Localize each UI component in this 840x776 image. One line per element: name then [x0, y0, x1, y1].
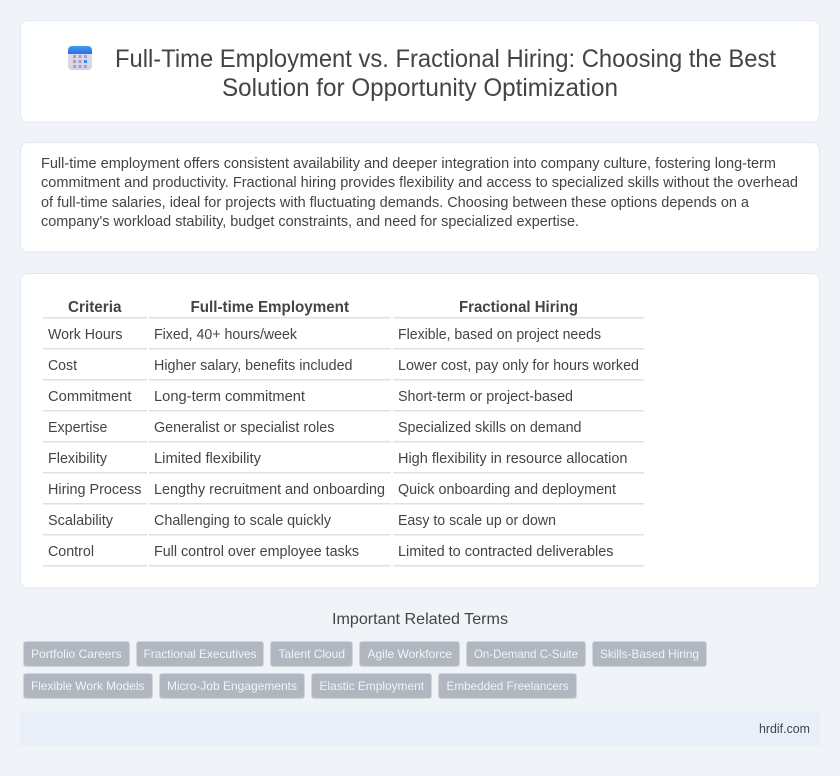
- row: control: Full control over employee tasks: [154, 544, 359, 560]
- tag: Skills-Based Hiring: Skills-Based Hiring: [600, 647, 699, 661]
- heading: related terms: Important Related Terms: [332, 611, 508, 628]
- tag: Micro-Job Engagements: [160, 674, 304, 698]
- icon: calendar: [68, 46, 92, 70]
- tag: Portfolio Careers: [24, 642, 130, 666]
- row: control: Limited to contracted deliverables: [398, 544, 614, 560]
- tag: Elastic Employment: Elastic Employment: [320, 679, 425, 693]
- row: expertise: Generalist or specialist roles: [154, 420, 334, 436]
- row: commitment: Long-term commitment: [154, 389, 305, 405]
- summary paragraph: [41, 156, 798, 230]
- summary paragraph: commitment and productivity. Fractional hiring provides flexibility and access to specialized skills without the overhead: [41, 175, 798, 191]
- tag: Fractional Executives: [136, 642, 264, 666]
- title: Full-Time Employment vs. Fractional Hiring: Choosing the Best: [115, 45, 776, 73]
- tag: Portfolio Careers: Portfolio Careers: [31, 647, 122, 661]
- tag: Embedded Freelancers: Embedded Freelancers: [446, 679, 568, 693]
- row: expertise: [48, 420, 582, 436]
- row: cost: Higher salary, benefits included: [154, 358, 352, 374]
- row: cost: Cost: [48, 358, 77, 374]
- tag: On-Demand C-Suite: On-Demand C-Suite: [474, 647, 578, 661]
- table header: Criteria: [68, 299, 122, 316]
- row: work hours: Flexible, based on project needs: [398, 327, 601, 343]
- row: hiring process: [48, 482, 616, 498]
- row: work hours: [48, 327, 601, 343]
- panel: summary text: [20, 142, 820, 252]
- footer bar: [20, 712, 820, 746]
- tag: Talent Cloud: [270, 642, 352, 666]
- table header: Full-time Employment: [190, 299, 350, 316]
- title: Solution for Opportunity Optimization: [222, 74, 618, 102]
- tag: Skills-Based Hiring: [592, 642, 706, 666]
- row: commitment: Commitment: [48, 389, 132, 405]
- row: cost: [48, 358, 639, 374]
- row: work hours: Work Hours: [48, 327, 122, 343]
- tag: On-Demand C-Suite: [466, 642, 586, 666]
- footer source: hrdif.com: [759, 721, 810, 736]
- table header: [68, 299, 578, 316]
- row: cost: Lower cost, pay only for hours worked: [398, 358, 639, 374]
- tag: Agile Workforce: [360, 642, 460, 666]
- row: hiring process: Lengthy recruitment and onboarding: [154, 482, 385, 498]
- row: scalability: Scalability: [48, 513, 114, 529]
- summary paragraph: of full-time salaries, ideal for projects with fluctuating demands. Choosing between these options depends on a: [41, 195, 749, 211]
- tag: Flexible Work Models: [24, 674, 152, 698]
- title: [115, 45, 776, 102]
- row: control: [48, 544, 614, 560]
- row: expertise: Specialized skills on demand: [398, 420, 582, 436]
- summary paragraph: Full-time employment offers consistent availability and deeper integration into company culture, fostering long-term: [41, 156, 776, 172]
- tag: Elastic Employment: [312, 674, 432, 698]
- row: commitment: Short-term or project-based: [398, 389, 573, 405]
- panel: related term tags: [24, 642, 706, 698]
- row: control: Control: [48, 544, 94, 560]
- row: flexibility: Flexibility: [48, 451, 108, 467]
- row: expertise: Expertise: [48, 420, 108, 436]
- tag: Talent Cloud: Talent Cloud: [278, 647, 345, 661]
- row: scalability: Challenging to scale quickly: [154, 513, 332, 529]
- row: hiring process: Hiring Process: [48, 482, 142, 498]
- panel: title card: [20, 20, 820, 122]
- tag: Flexible Work Models: Flexible Work Models: [31, 679, 144, 693]
- panel: comparison table: [20, 274, 820, 588]
- tag: Micro-Job Engagements: Micro-Job Engagements: [167, 679, 297, 693]
- row: flexibility: High flexibility in resource allocation: [398, 451, 628, 467]
- row: work hours: Fixed, 40+ hours/week: [154, 327, 298, 343]
- summary paragraph: company's workload stability, budget constraints, and need for specialized expertise.: [41, 214, 579, 230]
- row: flexibility: [48, 451, 628, 467]
- tag: Agile Workforce: Agile Workforce: [368, 647, 452, 661]
- tag: Fractional Executives: Fractional Executives: [144, 647, 256, 661]
- tag: Embedded Freelancers: [438, 674, 576, 698]
- table header: Fractional Hiring: [459, 299, 578, 316]
- row: commitment: [48, 389, 573, 405]
- row: scalability: Easy to scale up or down: [398, 513, 556, 529]
- row: hiring process: Quick onboarding and deployment: [398, 482, 616, 498]
- row: scalability: [48, 513, 556, 529]
- row: flexibility: Limited flexibility: [154, 451, 262, 467]
